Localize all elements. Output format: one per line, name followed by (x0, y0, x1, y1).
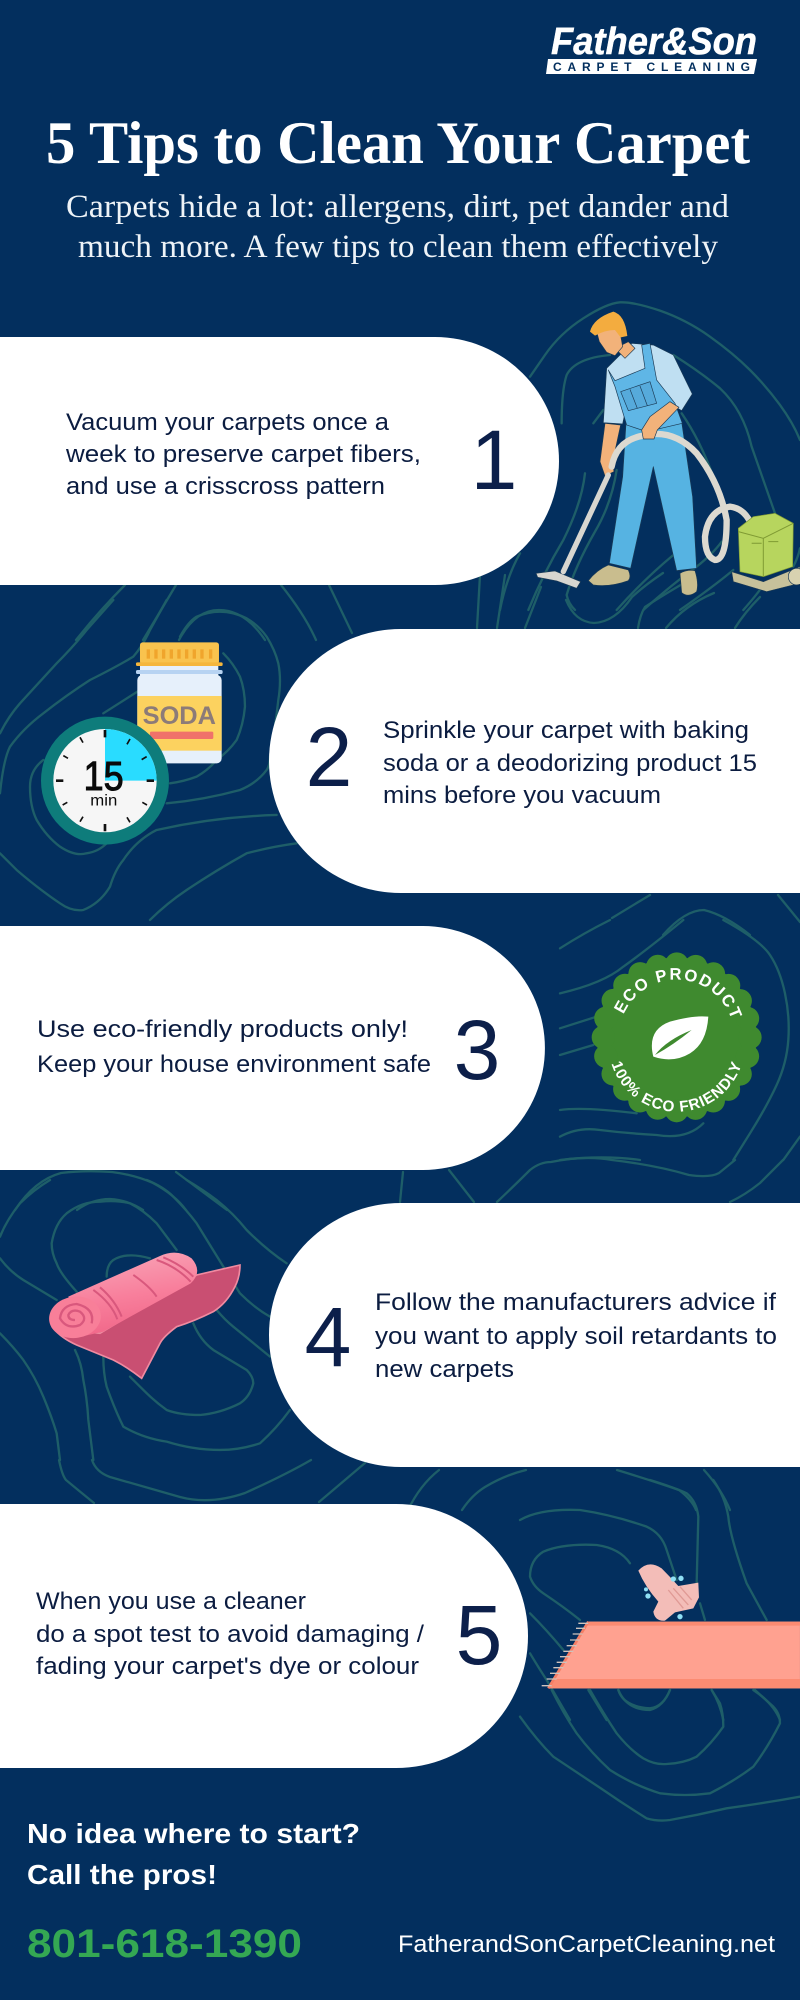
tip 4 text: you want to apply soil retardants to (375, 1323, 777, 1350)
icon: eco product badge (592, 952, 762, 1122)
rug (542, 1622, 800, 1688)
tip 3 text: Keep your house environment safe (37, 1051, 431, 1078)
website: FatherandSonCarpetCleaning.net (398, 1931, 775, 1958)
call to action: No idea where to start? (27, 1818, 360, 1849)
tip 1 text: and use a crisscross pattern (66, 473, 385, 500)
tip 5 text: fading your carpet's dye or colour (36, 1653, 419, 1680)
icon: soda jar and 15 minute timer (41, 642, 223, 845)
tip 4 number: 4 (305, 1290, 351, 1384)
vacuum base (732, 567, 800, 592)
vacuum body (738, 513, 793, 577)
badge bottom text: 100% ECO FRIENDLY (612, 1060, 740, 1112)
tip 5 text (36, 1588, 424, 1680)
subtitle: much more. A few tips to clean them effectively (78, 229, 718, 265)
tip 2 text (383, 717, 757, 809)
tip 5 number: 5 (456, 1588, 502, 1682)
shirt (603, 343, 692, 424)
tip 2 text: mins before you vacuum (383, 782, 661, 809)
tip 4 text: Follow the manufacturers advice if (375, 1289, 776, 1316)
tip 2 number: 2 (306, 710, 352, 804)
title: 5 Tips to Clean Your Carpet (46, 110, 750, 176)
overall bib (608, 343, 682, 432)
tip 4 text: new carpets (375, 1356, 514, 1383)
vacuum details (738, 523, 793, 577)
tip 2 text: Sprinkle your carpet with baking (383, 717, 749, 744)
panel: tip 3 (0, 926, 545, 1170)
subtitle (66, 189, 730, 265)
tip 1 text (65, 409, 421, 500)
call to action (27, 1818, 360, 1890)
left shoe (588, 565, 630, 586)
icon: man with vacuum cleaner (536, 312, 800, 595)
tip 1 text: week to preserve carpet fibers, (65, 441, 421, 468)
panel: tip 1 (0, 337, 559, 585)
tip 3 text: Use eco-friendly products only! (37, 1016, 408, 1043)
left forearm (600, 423, 621, 476)
right shoe (680, 570, 698, 595)
flat carpet (53, 1265, 240, 1378)
subtitle: Carpets hide a lot: allergens, dirt, pet dander and (66, 189, 730, 225)
neck (615, 342, 635, 358)
tip 4 text (375, 1289, 777, 1383)
tip 2 text: soda or a deodorizing product 15 (383, 750, 757, 777)
roll end spiral (46, 1293, 104, 1341)
soda label: SODA (143, 703, 216, 730)
hose (612, 434, 750, 560)
trousers (609, 422, 697, 571)
badge top text: ECO PRODUCT (614, 968, 742, 1016)
panel: tip 5 (0, 1504, 528, 1768)
right forearm and hand (642, 402, 679, 439)
tip 5 text: do a spot test to avoid damaging / (36, 1621, 424, 1648)
tip 1 text: Vacuum your carpets once a (66, 409, 389, 436)
icon: rolled pink carpet (46, 1253, 240, 1378)
roll body (68, 1253, 197, 1338)
tip 3 number: 3 (454, 1003, 500, 1097)
tip 5 text: When you use a cleaner (36, 1588, 306, 1615)
logo: Father & Son Carpet Cleaning: Father&Son (551, 21, 757, 63)
timer: 15 (84, 753, 124, 799)
call to action: Call the pros! (27, 1859, 217, 1890)
soda jar (136, 642, 223, 763)
bib pocket (621, 382, 657, 411)
panel: tip 2 (269, 629, 800, 893)
panel: tip 4 (269, 1203, 800, 1467)
nozzle and wand (536, 475, 608, 588)
logo: Father & Son Carpet Cleaning: CARPET CLEANING (553, 60, 750, 74)
face (597, 325, 623, 356)
icon: rug with scrubbing hands (542, 1564, 800, 1688)
hair (590, 312, 627, 337)
hands (638, 1564, 699, 1621)
roll stripes (93, 1257, 193, 1319)
leaf (652, 1016, 708, 1059)
timer (41, 717, 169, 845)
timer: min (90, 793, 117, 810)
tip 3 text (37, 1016, 431, 1078)
phone number: 801-618-1390 (27, 1922, 302, 1966)
tip 1 number: 1 (471, 413, 517, 507)
